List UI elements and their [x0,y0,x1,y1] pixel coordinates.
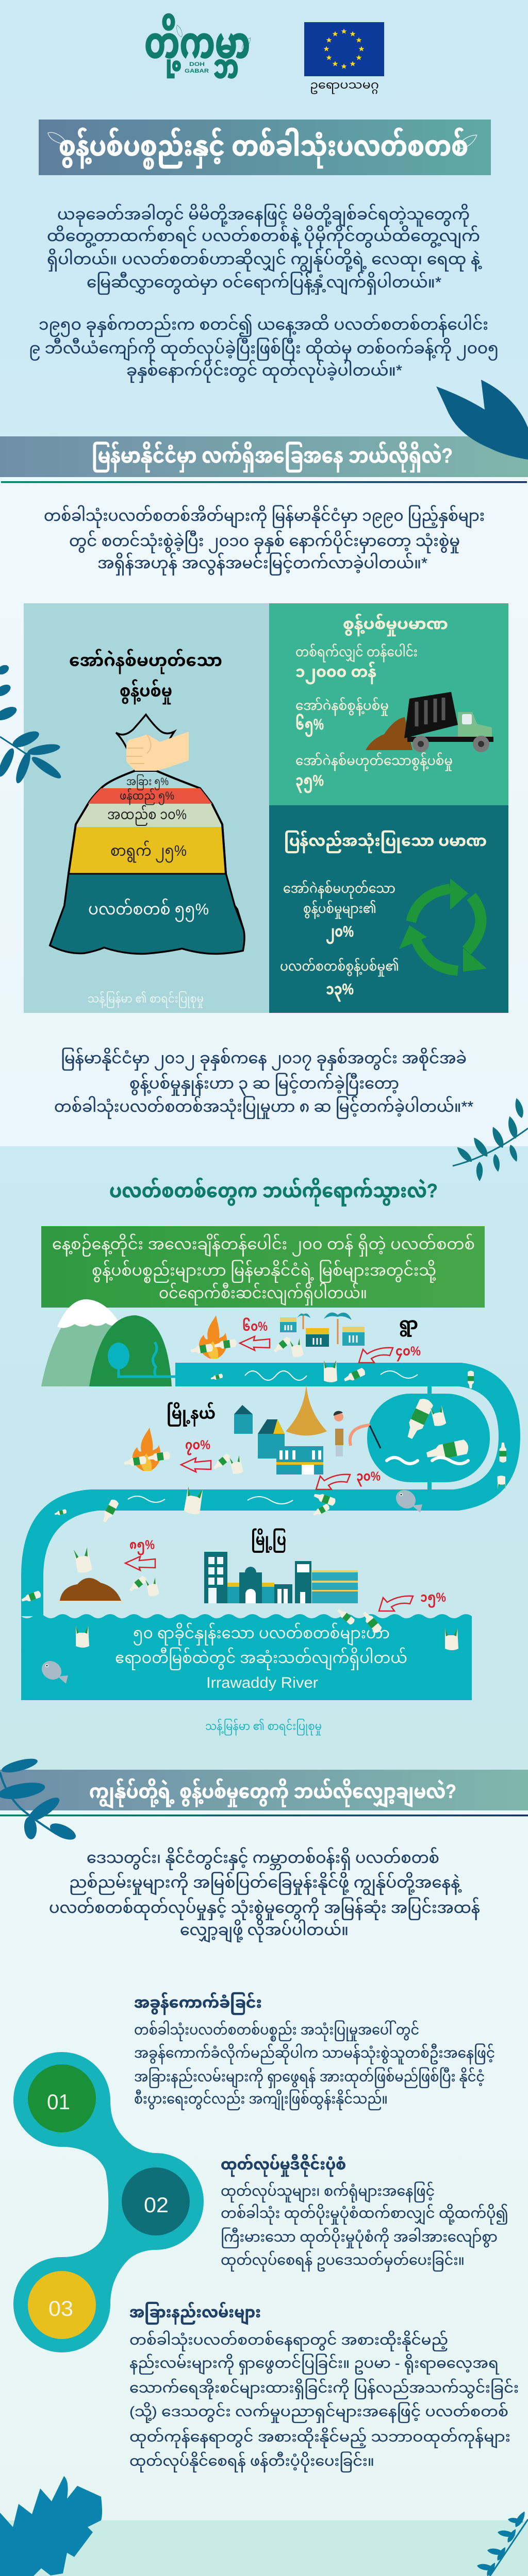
section background: intro [0,0,528,436]
village buildings [280,1313,365,1347]
decorative fern right [453,1097,528,1181]
logo: Doh Gabar: GABAR [185,68,209,74]
title banner: စွန့်ပစ်ပစ္စည်းနှင့် တစ်ခါသုံးပလတ်စတစ် [59,127,468,170]
banner: how to reduce: ကျွန်ုပ်တို့ရဲ့ စွန့်ပစ်မှုတွေကို ဘယ်လိုလျှော့ချမလဲ? [89,1778,456,1808]
panel: waste amount: အော်ဂဲနစ်မဟုတ်သောစွန့်ပစ်မှု [295,752,453,771]
panel: waste amount: တစ်ရက်လျှင် တန်ပေါင်း [295,643,418,663]
river mouth callout: Irrawaddy River [206,1674,318,1691]
panel: waste amount: ၁၂၀၀၀ တန် [295,661,376,684]
chart: river flow diagram [21,1299,520,1700]
village river share: ၄၀% [395,1344,421,1362]
green callout: နေ့စဉ်နေ့တိုင်း အလေးချိန်တန်ပေါင်း ၂၀၀ တန် ရှိတဲ့ ပလတ်စတစ် [52,1233,475,1257]
text block: product design: ထုတ်လုပ်စေရန် ဥပဒေသတ်မှတ်ပေးခြင်း။ [221,2250,465,2272]
city river share [379,1590,446,1611]
section background: reduce [0,1810,528,2520]
river mouth callout [21,1607,472,1700]
section background: river [0,1146,528,1770]
panel: waste amount: ၃၅% [295,772,324,793]
panel: non-organic waste bag: စွန့်ပစ်မှု [120,679,172,704]
panel: recycled amount: စွန့်ပစ်မှုများ၏ [303,900,376,919]
intro paragraph 2: ခုနှစ်နောက်ပိုင်းတွင် ထုတ်လုပ်ခဲ့ပါတယ်။* [126,359,402,383]
river mouth callout: ၅၀ ရာခိုင်နှုန်းသော ပလတ်စတစ်များဟာ [133,1622,390,1646]
banner: current situation: မြန်မာနိုင်ငံမှာ လက်ရှိအခြေအနေ ဘယ်လိုရှိလဲ? [92,442,453,472]
icon: dump truck [366,692,493,752]
text block: product design: တစ်ခါသုံး ထုတ်ပိုးမှုပုံစံထက်စာလျှင် ထို့ထက်ပို၍ [221,2204,508,2225]
section background: nine ways [0,2520,528,2576]
intro paragraph 2 [29,313,499,383]
situation paragraph: အရှိန်အဟုန် အလွန်အမင်းမြင့်တက်လာခဲ့ပါတယ်။* [97,552,427,576]
logo: Doh Gabar: DOH [189,61,205,67]
panel: non-organic waste bag [24,603,269,1013]
city river share: ၁၅% [420,1590,446,1608]
city dump group [60,1538,159,1601]
heading: where does plastic go: ပလတ်စတစ်တွေက ဘယ်ကိုရောက်သွားလဲ? [109,1177,438,1207]
city dump group: ၈၅% [129,1538,155,1555]
city label: မြို့ပြ [251,1528,286,1553]
growth paragraph: မြန်မာနိုင်ငံမှာ ၂၀၁၂ ခုနှစ်ကနေ ၂၀၁၇ ခုနှစ်အတွင်း အစိုင်အခဲ [61,1047,467,1071]
text block: other methods: အခြားနည်းလမ်းများ [129,2301,261,2325]
text block: taxation: အခွန်ကောက်ခံခြင်း [134,1992,262,2015]
panel: waste amount: ၆၅% [295,713,324,737]
step 02: 02 [144,2193,169,2217]
city buildings [204,1552,358,1603]
village river share [359,1344,421,1363]
text block: product design [221,2154,508,2272]
intro paragraph 2: ၉ ဘီလီယံကျော်ကို ထုတ်လုပ်ခဲ့ပြီးဖြစ်ပြီး ထိုထဲမှ တစ်ဝက်ခန့်ကို ၂၀၀၅ [29,337,499,361]
decorative fern top right [469,2510,528,2576]
panel: recycled amount: ၂၀% [326,923,354,944]
text block: product design: ကြီးမားသော ထုတ်ပိုးမှုပုံစံကို အခါအားလျော်စွာ [221,2227,498,2248]
bag body and composition bands: ဖန်ထည် ၅% [120,788,174,805]
green callout [41,1226,485,1308]
section background: current situation [0,477,528,1146]
bag body and composition bands [50,771,244,954]
decorative leaf sprig left [0,1756,78,1843]
intro paragraph 2: ၁၉၅၀ ခုနှစ်ကတည်းက စတင်၍ ယနေ့အထိ ပလတ်စတစ်တန်ပေါင်း [39,313,488,337]
village burn group: ၆၀% [242,1318,268,1334]
intro paragraph 1: မြေဆီလွှာတွေထဲမှာ ဝင်ရောက်ပြန့်နှံ့လျက်ရှိပါတယ်။* [87,271,441,295]
text block: other methods: ထုတ်ကုန်နေရာတွင် အစားထိုးနိုင်မည့် သဘာဝထုတ်ကုန်များ [129,2427,510,2448]
bag body and composition bands: အခြား ၅% [126,774,169,790]
bag body and composition bands: ပလတ်စတစ် ၅၅% [88,898,209,922]
litter in river [21,1360,506,1604]
growth paragraph: စွန့်ပစ်မှုနှုန်းဟာ ၃ ဆ မြင့်တက်ခဲ့ပြီးတော့ [129,1072,399,1096]
intro paragraph 1: ယခုခေတ်အခါတွင် မိမိတို့အနေဖြင့် မိမိတို့ချစ်ခင်ရတဲ့သူတွေကို [57,203,470,227]
panel: non-organic waste bag: အော်ဂဲနစ်မဟုတ်သော [69,649,222,674]
credit: သန့်မြန်မာ ၏ စာရင်းပြုစုမှု [88,991,204,1008]
person pouring [334,1411,381,1456]
mountains [41,1299,175,1386]
text block: product design: ထုတ်လုပ်မှုဒီဇိုင်းပုံစံ [221,2154,346,2177]
reduce paragraph: လျှော့ချဖို့ လိုအပ်ပါတယ်။ [180,1919,349,1943]
step 02 [122,2167,190,2235]
river mouth callout: ဧရာဝတီမြစ်ထဲတွင် အဆုံးသတ်လျက်ရှိပါတယ် [115,1647,407,1671]
icon: hand holding bag [126,732,189,771]
intro paragraph 1 [47,203,482,295]
icon: recycling arrows [399,878,487,972]
situation paragraph: တစ်ခါသုံးပလတ်စတစ်အိတ်များကို မြန်မာနိုင်ငံမှာ ၁၉၉၀ ပြည့်နှစ်များ [44,504,485,529]
text block: taxation: အခွန်ကောက်ခံလိုက်မည်ဆိုပါက သာမန်သုံးစွဲသူတစ်ဦးအနေဖြင့် [134,2043,495,2064]
town burn group [124,1428,243,1475]
text block: taxation: အခြားနည်းလမ်းများကို ရှာဖွေရန် အားထုတ်ဖြစ်မည်ဖြစ်ပြီး နိုင်ငံ့ [134,2067,485,2088]
text block: other methods: တစ်ခါသုံးပလတ်စတစ်နေရာတွင် အစားထိုးနိုင်မည့် [129,2330,448,2351]
logo: Doh Gabar: တို့ကမ္ဘာ [144,13,250,78]
logo: Doh Gabar [144,13,252,78]
text block: other methods: (သို့) ဒေသတွင်း လက်မှုပညာရှင်များအနေဖြင့် ပလတ်စတစ် [129,2402,508,2423]
green callout: ဝင်ရောက်စီးဆင်းလျက်ရှိပါတယ်။ [159,1282,367,1306]
reduce paragraph [49,1846,480,1943]
panel: waste amount: အော်ဂဲနစ်စွန့်ပစ်မှု [295,697,389,716]
intro paragraph 1: ရှိပါတယ်။ ပလတ်စတစ်ဟာဆိုလျှင် ကျွန်ုပ်တို့ရဲ့ လေထု၊ ရေထု နဲ့ [47,248,482,274]
banner: how to reduce [0,1770,528,1817]
step 01: 01 [47,2090,70,2114]
text block: taxation: စီးပွားရေးတွင်လည်း အကျိုးဖြစ်ထွန်းနိုင်သည်။ [134,2089,388,2110]
town burn group: ၇၀% [185,1438,210,1455]
town river share: ၃၀% [356,1469,381,1487]
panel: waste amount: စွန့်ပစ်မှုပမာဏ [343,613,448,636]
EU label: ဥရောပသမဂ္ဂ [310,78,379,95]
village label: ရွာ [399,1314,418,1337]
title banner [39,120,491,175]
bag body and composition bands: အထည်စ ၁၀% [107,805,187,826]
green callout: စွန့်ပစ်ပစ္စည်းများဟာ မြန်မာနိုင်ငံရဲ့ မြစ်များအတွင်းသို့ [92,1259,436,1284]
town buildings and pagoda [234,1384,327,1475]
reduce paragraph: ဒေသတွင်း၊ နိုင်ငံတွင်းနှင့် ကမ္ဘာတစ်ဝန်းရှိ ပလတ်စတစ် [87,1846,439,1871]
situation paragraph: တွင် စတင်သုံးစွဲခဲ့ပြီး ၂၀၁၀ ခုနှစ် နောက်ပိုင်းမှာတော့ သုံးစွဲမှု [69,530,460,554]
growth paragraph [54,1047,473,1120]
bag frill [116,715,174,771]
text block: other methods: နည်းလမ်းများကို ရှာဖွေတင်ပြခြင်း။ ဥပမာ - ရိုးရာဓလေ့အရ [129,2353,499,2375]
text block: other methods: ထုတ်လုပ်နိုင်စေရန် ဖန်တီးပံ့ပိုးပေးခြင်း။ [129,2451,374,2472]
situation paragraph [44,504,485,576]
river path [21,1363,520,1616]
icon: EU flag [304,22,384,76]
town label: မြို့နယ် [167,1402,216,1427]
panel: waste amount [269,603,508,805]
bag body and composition bands: စာရွက် ၂၅% [110,841,187,863]
panel: recycled amount: အော်ဂဲနစ်မဟုတ်သော [283,879,395,899]
text block: taxation: တစ်ခါသုံးပလတ်စတစ်ပစ္စည်း အသုံးပြုမှုအပေါ် တွင် [134,2020,419,2042]
reduce paragraph: ညစ်ညမ်းမှုများကို အမြစ်ပြတ်ခြေမှုန်းနိုင်ဖို့ ကျွန်ုပ်တို့အနေနဲ့ [69,1871,462,1897]
panel: recycled amount [269,805,508,1013]
chart: three numbered steps [13,2052,204,2352]
text block: other methods [129,2301,519,2472]
text block: product design: ထုတ်လုပ်သူများ၊ စက်ရုံများအနေဖြင့် [221,2181,435,2202]
text block: taxation [134,1992,495,2110]
panel: recycled amount: ပြန်လည်အသုံးပြုသော ပမာဏ [284,830,487,853]
waves in river [21,1371,440,1676]
step 03: 03 [48,2296,73,2320]
town river share [316,1469,381,1489]
village burn group [190,1315,304,1359]
intro paragraph 1: ထိတွေ့တာထက်စာရင် ပလတ်စတစ်နဲ့ ပိုမိုကိုင်တွယ်ထိတွေ့လျက် [47,225,480,249]
panel: recycled amount: ၁၃% [326,981,354,1002]
decorative monstera leaf [0,2476,102,2576]
river pool with litter [367,1386,490,1489]
decorative leaf top right [436,380,528,460]
credit: သန့်မြန်မာ ၏ စာရင်းပြုစုမှု [205,1718,322,1735]
reduce paragraph: ပလတ်စတစ်ထုတ်လုပ်မှုနှင့် သုံးစွဲမှုတွေကို အမြန်ဆုံး အပြင်းအထန် [49,1896,480,1921]
text block: other methods: သောက်ရေအိုးစင်များထားရှိခြင်းကို ပြန်လည်အသက်သွင်းခြင်း [129,2378,519,2399]
panel: recycled amount: ပလတ်စတစ်စွန့်ပစ်မှု၏ [280,957,399,977]
step 03 [28,2271,96,2339]
decorative fern left [0,663,63,785]
step 01 [28,2064,96,2132]
banner: current situation [0,436,528,483]
growth paragraph: တစ်ခါသုံးပလတ်စတစ်အသုံးပြုမှုဟာ ၈ ဆ မြင့်တက်ခဲ့ပါတယ်။** [54,1095,473,1120]
